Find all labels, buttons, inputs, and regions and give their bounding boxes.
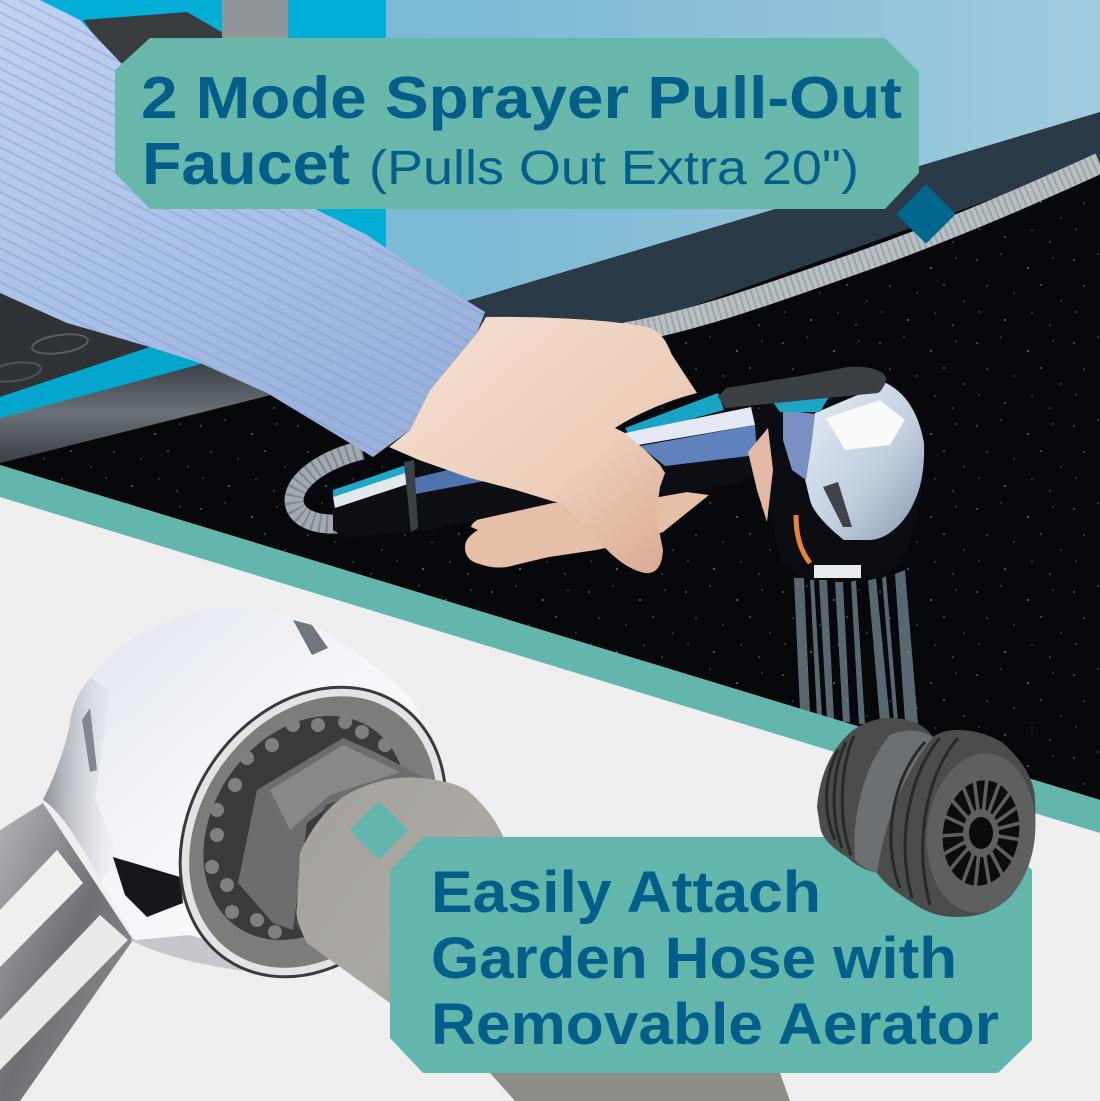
hex nut [238,738,440,930]
outlet ring [126,636,500,1028]
chrome lower neck [130,927,267,973]
headline word Faucet: Faucet [142,131,350,197]
callout: bottom headline [390,837,1032,1073]
orange reflection [796,515,810,563]
black sink basin [0,160,1100,800]
dark tub step [83,12,230,70]
hose loop at left of sprayer [294,450,362,524]
grey post [222,0,288,38]
headline line three: Removable Aerator [431,992,999,1057]
aerator thread grooves [827,736,958,905]
diagonal teal band [0,465,1100,833]
braided hose along rim [625,163,1100,333]
lower fingers [465,490,709,568]
teal strip under mat [0,347,205,418]
chrome arm [0,803,133,1101]
headline line one: 2 Mode Sprayer Pull-Out [141,65,902,131]
icon: blue diamond [899,187,953,241]
icon: teal diamond [352,803,406,858]
sink speckle [43,201,1099,785]
sleeve [0,0,485,457]
blue wall background [0,0,1100,480]
sprayer wand [333,393,768,538]
chrome dome [43,607,447,975]
teal tub panel behind the arm [0,0,386,400]
rubber switch [718,367,886,408]
hand palm and thumb [389,317,697,573]
icon: removable aerator [817,718,1043,918]
aerator neck [854,731,933,873]
photo: faucet head close-up [0,607,790,1101]
reflection of person [783,410,815,480]
aerator face [919,748,1043,918]
headline line one: Easily Attach [431,860,821,925]
callout: top headline [115,38,919,209]
headline line two: Garden Hose with [431,926,957,991]
sprayer head [748,378,924,581]
dark mat [0,288,150,397]
photo: hand pulling out sprayer over sink [0,0,1100,800]
nozzle [814,565,861,578]
rim left [0,363,290,463]
rim top right [386,112,1100,400]
headline parenthetical: (Pulls Out Extra 20") [369,142,859,195]
lower white background [0,497,1100,1101]
water spray [794,570,918,724]
grey hose [296,777,790,1101]
